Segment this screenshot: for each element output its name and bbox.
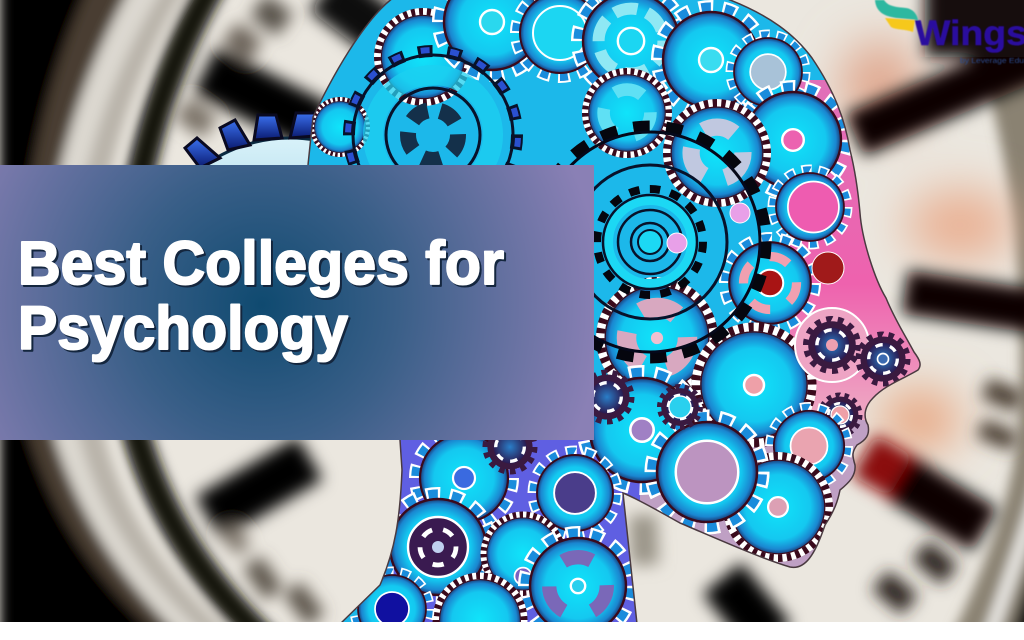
- gear: pink ring: [795, 308, 869, 382]
- gear: large mauve hub: [651, 416, 763, 528]
- concentric toothed rings: upper: [343, 45, 523, 165]
- gear: neck bottom fine: [432, 572, 528, 622]
- logo swoosh teal: [875, 0, 918, 20]
- gear: red hub: [724, 237, 816, 329]
- gear: lip: [820, 395, 860, 435]
- logo: Wings: [875, 0, 1024, 65]
- gear: red crescent: [812, 252, 844, 284]
- gear: neck ringed: [384, 493, 492, 601]
- gear: neck upper left: [414, 428, 514, 528]
- logo wordmark: Wings: [915, 14, 1024, 53]
- gear: fine left: [585, 71, 669, 155]
- gear: neck cyan: [584, 372, 700, 488]
- gear: crown large: [438, 0, 546, 76]
- logo tagline: by Leverage Edu: [960, 58, 1024, 65]
- gear: upper forehead: [657, 6, 765, 114]
- logo swoosh yellow: [885, 18, 915, 32]
- head silhouette filled with gears: [290, 0, 940, 640]
- gear: lower temple fine: [600, 281, 714, 395]
- gear: grey hub: [730, 34, 806, 110]
- gear: large mauve hub front: [651, 416, 763, 528]
- head base colour: [290, 0, 940, 630]
- gear: pink hub forehead: [739, 86, 847, 194]
- concentric toothed rings: temple: [534, 126, 766, 358]
- gear: jaw fine: [727, 456, 829, 558]
- head outline: [308, 0, 920, 624]
- gear: small neck top: [482, 440, 538, 474]
- gear: crown right: [515, 0, 605, 78]
- title: Psychology: [18, 294, 348, 362]
- gear: small white hub: [659, 386, 701, 428]
- gear: neck navy hub: [532, 450, 618, 536]
- gear: neck bottom blue hub: [350, 566, 434, 622]
- gear: fine windowed: [667, 103, 767, 203]
- title: Best Colleges for: [18, 229, 504, 297]
- gear: windowed top: [577, 0, 685, 95]
- gear: nose: [858, 334, 908, 384]
- white strip at bottom: [0, 622, 1024, 640]
- title: [18, 229, 504, 362]
- gear: mid cyan pink hub: [696, 327, 812, 443]
- gear: chin hub pink: [769, 406, 849, 486]
- large gear behind the banner: [143, 113, 437, 432]
- gear: neck fine: [483, 514, 563, 594]
- gear: small under banner: [582, 372, 632, 422]
- gear: neck windowed: [524, 532, 632, 640]
- gear: crown fine: [377, 11, 469, 103]
- title banner: [0, 165, 594, 440]
- gear: pink forehead: [772, 169, 848, 245]
- gear: small dark crown: [312, 99, 368, 155]
